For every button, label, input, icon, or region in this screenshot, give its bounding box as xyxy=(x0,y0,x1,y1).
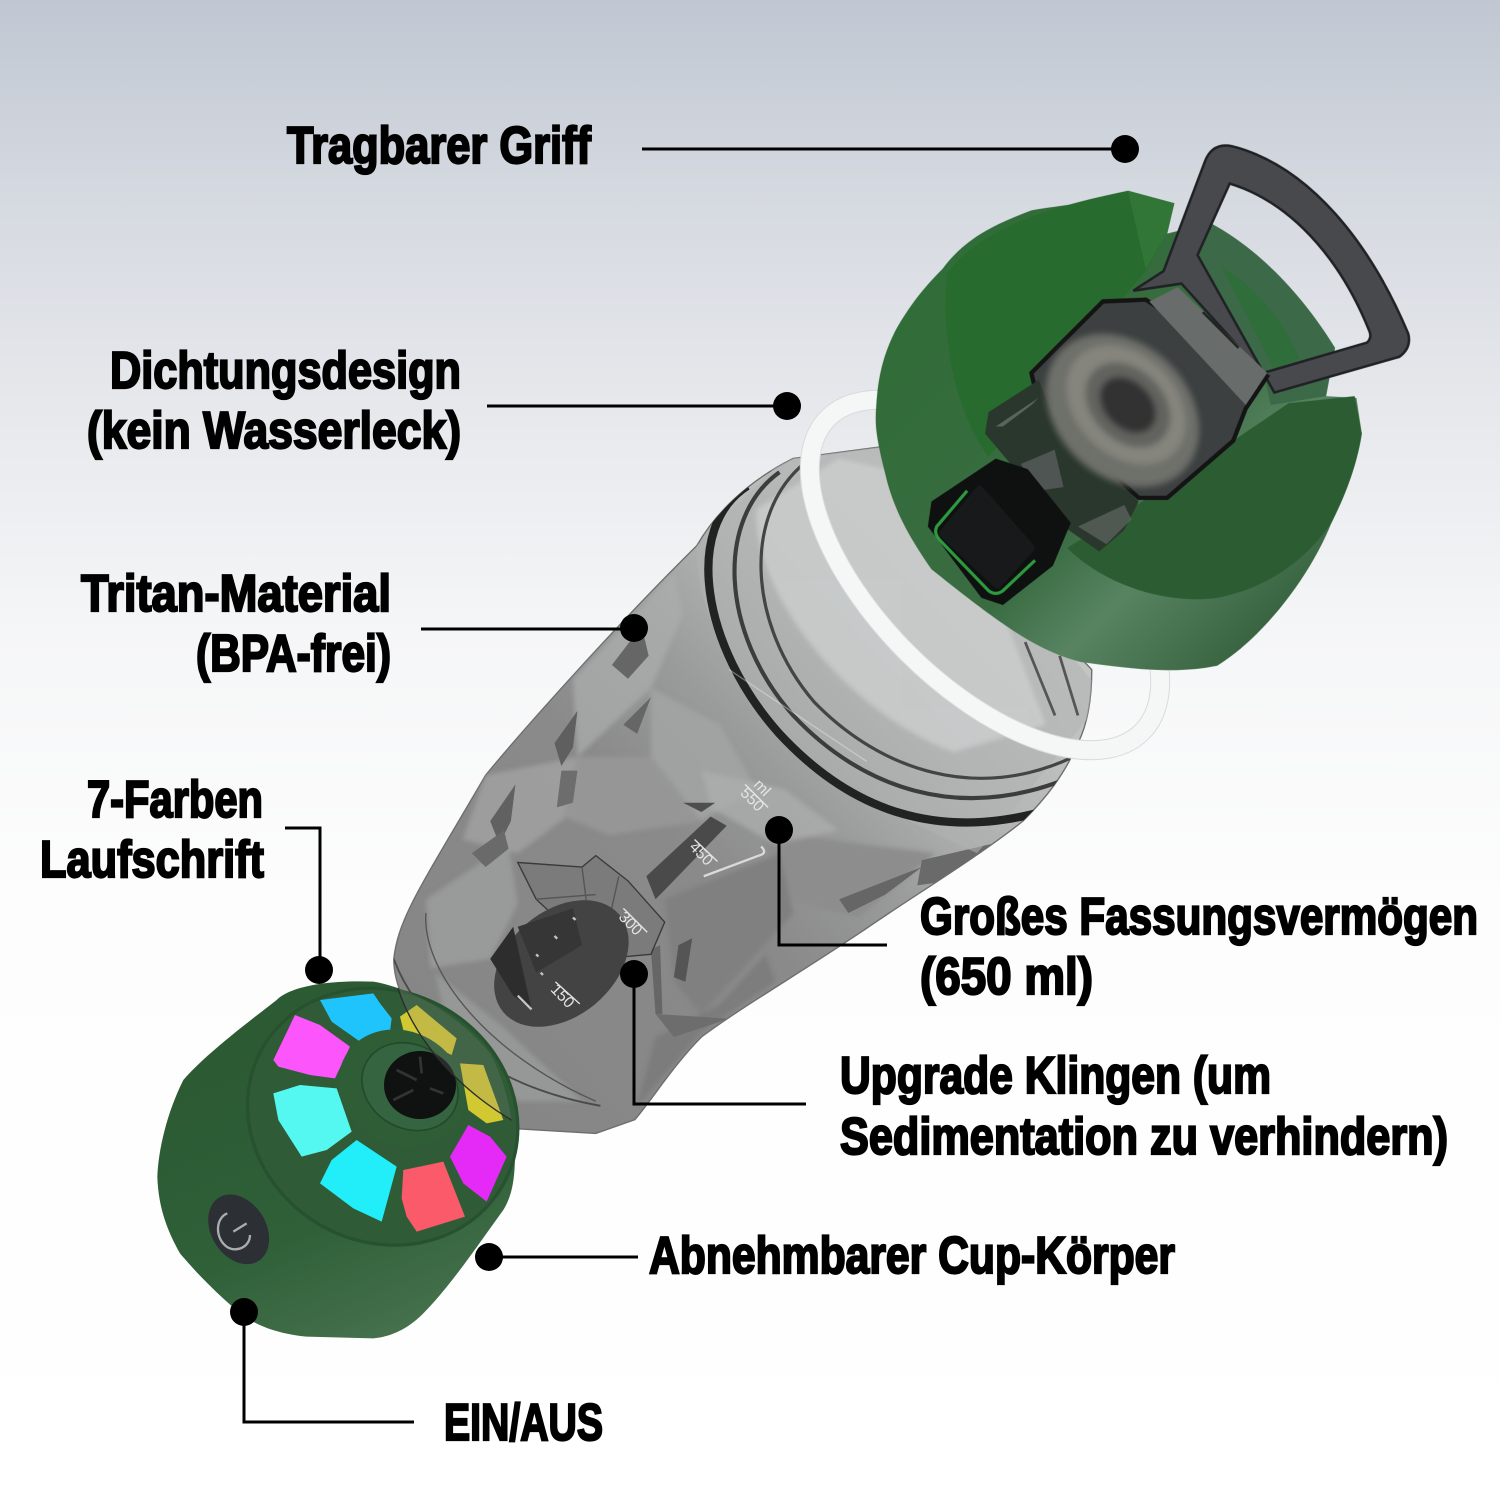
label: Tritan-Material: (BPA-frei) xyxy=(196,625,391,683)
label: Tritan-Material: Tritan-Material xyxy=(81,565,391,623)
label: Dichtungsdesign: (kein Wasserleck) xyxy=(87,402,461,460)
screw xyxy=(1021,450,1064,491)
seal xyxy=(1015,303,1230,518)
label: EIN/AUS xyxy=(230,1298,603,1452)
stem xyxy=(985,380,1139,551)
lid top face xyxy=(945,191,1174,457)
label: 7-Farben Laufschrift xyxy=(40,771,333,984)
illustration: cup body xyxy=(394,431,1106,1133)
measuring scale: 300 xyxy=(615,909,646,939)
label: Großes Fassungsvermögen xyxy=(765,816,1478,1006)
measuring scale: ml xyxy=(750,776,774,800)
measuring scale xyxy=(547,776,774,1012)
power button xyxy=(196,1183,282,1275)
valve body xyxy=(1031,300,1267,498)
label: Großes Fassungsvermögen: (650 ml) xyxy=(920,948,1093,1006)
button xyxy=(928,459,1071,605)
handle xyxy=(1133,146,1409,392)
label: Upgrade Klingen: Upgrade Klingen (um xyxy=(840,1047,1271,1105)
label: Abnehmbarer Cup-Körper: Abnehmbarer Cup-Körper xyxy=(649,1227,1175,1285)
base body xyxy=(157,981,515,1338)
cup edge over base xyxy=(397,988,512,1121)
label: Tragbarer Griff: Tragbarer Griff xyxy=(287,117,592,175)
label: 7-Farben Laufschrift: Laufschrift xyxy=(40,831,264,889)
neck xyxy=(697,431,1106,853)
LED segments xyxy=(273,993,507,1232)
label: Dichtungsdesign: Dichtungsdesign xyxy=(110,342,461,400)
measuring scale: 150 xyxy=(547,981,578,1012)
label: Abnehmbarer Cup-Körper xyxy=(475,1227,1175,1285)
threads and O-ring xyxy=(708,486,1041,822)
illustration: green lid with handle xyxy=(876,146,1409,670)
illustration: silicone gasket ring xyxy=(750,340,1220,810)
central hub xyxy=(317,1007,486,1170)
label: Upgrade Klingen xyxy=(620,960,1448,1166)
blade cluster xyxy=(490,854,666,1027)
measuring scale: 550 xyxy=(737,785,767,815)
label: Dichtungsdesign xyxy=(87,342,801,460)
label: Tragbarer Griff xyxy=(287,117,1139,175)
measuring scale: 450 xyxy=(686,839,716,870)
illustration: green base with LED ring xyxy=(157,981,520,1338)
lid skirt xyxy=(876,191,1362,670)
top face xyxy=(200,939,565,1294)
label: Tritan-Material xyxy=(81,565,648,683)
label: 7-Farben Laufschrift: 7-Farben xyxy=(87,771,263,829)
label: EIN/AUS: EIN/AUS xyxy=(444,1394,603,1452)
